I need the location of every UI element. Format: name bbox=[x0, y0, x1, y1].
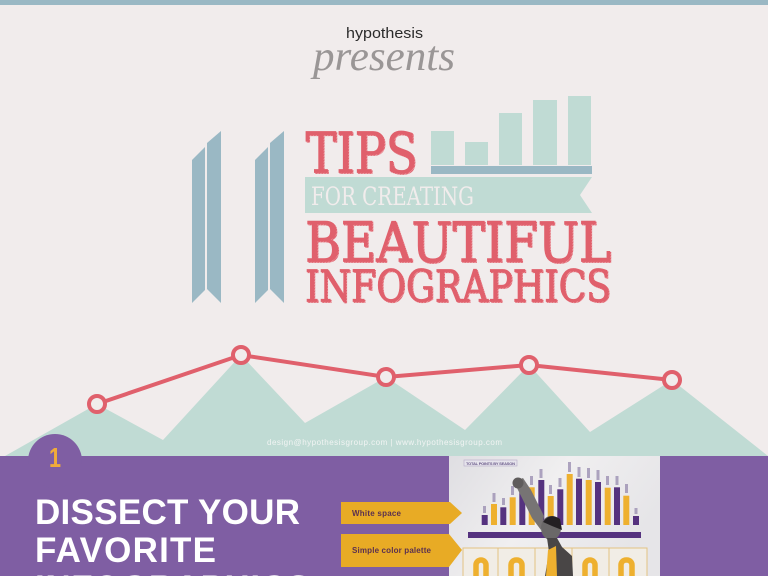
heading: infographics: INFOGRAPHICS bbox=[305, 262, 611, 312]
callout: white space: White space bbox=[352, 509, 402, 518]
script: presents: presents bbox=[310, 34, 455, 80]
heading: beautiful: BEAUTIFUL bbox=[305, 210, 611, 274]
tip heading: FAVORITE bbox=[35, 531, 216, 570]
bar chart baseline bbox=[431, 166, 592, 174]
numeral 11 drawn as ribbons bbox=[192, 131, 284, 303]
image title tag: TOTAL POINTS BY SEASON bbox=[466, 461, 515, 466]
line chart bbox=[89, 347, 680, 412]
title graphic bbox=[192, 96, 612, 314]
top bar bbox=[0, 0, 768, 5]
ribbon: for creating bbox=[305, 177, 592, 213]
panel: tip 1 bbox=[0, 434, 768, 576]
heading: beautiful: BEAUTIFUL bbox=[306, 212, 612, 276]
tip heading: DISSECT YOUR bbox=[35, 493, 300, 532]
image big numerals bbox=[476, 560, 632, 576]
callout: simple color palette: Simple color palette bbox=[352, 546, 432, 555]
mountains bbox=[5, 355, 768, 456]
mini bar chart bbox=[431, 96, 591, 165]
number badge: 1 bbox=[49, 442, 61, 473]
image bar chart bbox=[482, 474, 639, 525]
callout: white space bbox=[341, 502, 462, 524]
image bar value ticks bbox=[483, 462, 638, 514]
heading: tips: TIPS bbox=[306, 122, 418, 186]
heading: infographics: INFOGRAPHICS bbox=[306, 262, 612, 314]
sample infographic image bbox=[449, 456, 660, 576]
logo: hypothesis: hypothesis bbox=[346, 25, 423, 42]
contact line: design@hypothesisgroup.com | www.hypothesisgroup.com bbox=[267, 438, 502, 447]
image number boxes bbox=[463, 548, 647, 576]
image purple data row bbox=[468, 532, 641, 538]
callout: simple color palette bbox=[341, 534, 462, 567]
tip heading bbox=[35, 493, 310, 576]
ribbon: for creating: FOR CREATING bbox=[311, 182, 474, 211]
image player figure bbox=[512, 478, 573, 576]
number badge bbox=[28, 434, 82, 467]
heading: tips: TIPS bbox=[306, 122, 418, 188]
